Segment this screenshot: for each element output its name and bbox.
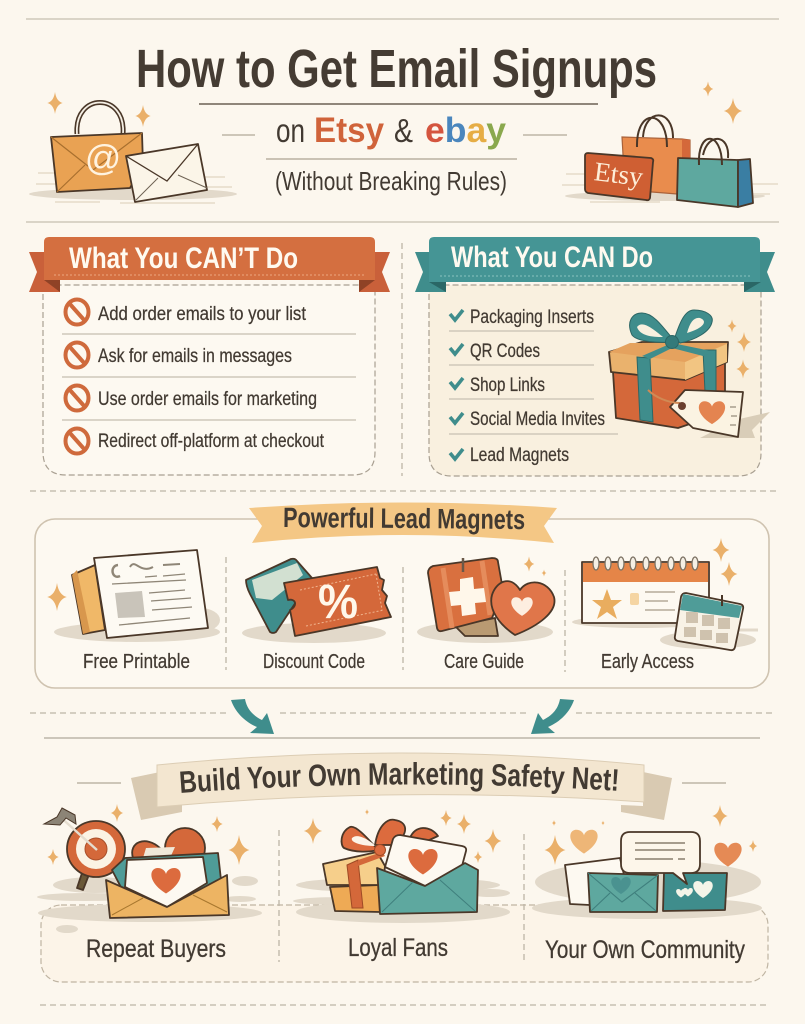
lead magnet: early access bbox=[572, 538, 758, 673]
benefit item 1: Packaging Inserts bbox=[470, 307, 594, 328]
item: your own community bbox=[532, 805, 762, 964]
icon: orange email bag and envelope: @ bbox=[85, 137, 121, 178]
item: loyal fans bbox=[293, 809, 510, 962]
rule item 2: Ask for emails in messages bbox=[98, 346, 292, 367]
rule item 1: Add order emails to your list bbox=[98, 304, 307, 325]
side dashes bbox=[77, 782, 726, 784]
ribbon bbox=[415, 237, 775, 292]
label: Care Guide bbox=[444, 651, 524, 673]
benefit item 2: QR Codes bbox=[470, 341, 540, 362]
title: How to Get Email Signups bbox=[136, 39, 657, 99]
ribbon bbox=[29, 237, 390, 292]
lead magnet: discount code: % bbox=[318, 576, 358, 629]
icon: gift box with tag bbox=[609, 310, 770, 438]
ribbon: What You CAN Do bbox=[451, 241, 653, 274]
card bbox=[41, 905, 768, 982]
card bbox=[43, 285, 375, 475]
icon: Etsy shopping bags bbox=[562, 82, 778, 207]
subtitle rule bbox=[266, 158, 517, 160]
benefit item 2 bbox=[450, 341, 540, 362]
ribbon heading: Build Your Own Marketing Safety Net! bbox=[180, 762, 618, 794]
label: Discount Code bbox=[263, 651, 365, 673]
subtitle: on Etsy and ebay bbox=[276, 111, 507, 150]
item: repeat buyers bbox=[37, 804, 262, 963]
label: Your Own Community bbox=[545, 936, 745, 964]
title underline bbox=[199, 103, 598, 105]
arrow: down left bbox=[531, 699, 574, 734]
label: Free Printable bbox=[83, 651, 190, 673]
ribbon heading bbox=[249, 502, 557, 543]
card bbox=[429, 285, 761, 476]
rule item 3: Use order emails for marketing bbox=[98, 389, 317, 410]
label: Loyal Fans bbox=[348, 934, 448, 962]
rule item 1 bbox=[66, 300, 307, 325]
header bottom rule bbox=[26, 221, 779, 223]
top rule bbox=[26, 18, 779, 20]
section rule bbox=[44, 737, 760, 739]
rule item 4 bbox=[66, 428, 325, 454]
benefit item 5: Lead Magnets bbox=[470, 445, 569, 466]
arrow: down right bbox=[231, 699, 274, 734]
lead magnet: free printable bbox=[47, 550, 220, 673]
label: Repeat Buyers bbox=[86, 935, 226, 963]
subtitle: on Etsy and ebay: on bbox=[276, 112, 305, 149]
ribbon heading bbox=[131, 752, 672, 820]
subtitle: on Etsy and ebay: ebay bbox=[425, 111, 507, 150]
bottom divider bbox=[40, 1004, 767, 1006]
label: Early Access bbox=[601, 651, 694, 673]
benefit item 4: Social Media Invites bbox=[470, 409, 605, 430]
rule item 4: Redirect off-platform at checkout bbox=[98, 431, 325, 452]
section divider bbox=[30, 490, 776, 492]
subtitle: on Etsy and ebay: Etsy bbox=[314, 111, 384, 150]
panel: what you can do bbox=[415, 237, 775, 476]
section divider with gaps bbox=[30, 712, 772, 714]
rule item 3 bbox=[66, 386, 317, 410]
panel: safety net bbox=[37, 752, 769, 983]
tagline: (Without Breaking Rules) bbox=[275, 166, 507, 196]
benefit item 3: Shop Links bbox=[470, 375, 545, 396]
subtitle: on Etsy and ebay: & bbox=[394, 112, 413, 149]
icon: orange email bag and envelope bbox=[29, 92, 237, 203]
center dashed divider bbox=[401, 243, 403, 476]
subtitle side dashes bbox=[222, 134, 567, 136]
rule item 2 bbox=[66, 342, 292, 368]
panel: powerful lead magnets bbox=[35, 502, 769, 688]
benefit item 3 bbox=[450, 375, 545, 396]
lead magnet: discount code bbox=[242, 559, 391, 673]
icon: Etsy shopping bags: Etsy bbox=[592, 156, 645, 192]
ribbon heading: Powerful Lead Magnets bbox=[283, 502, 525, 535]
lead magnet: care guide bbox=[417, 556, 555, 673]
ribbon: What You CAN’T Do bbox=[69, 242, 298, 275]
panel: what you can't do bbox=[29, 237, 390, 475]
card bbox=[35, 519, 769, 688]
